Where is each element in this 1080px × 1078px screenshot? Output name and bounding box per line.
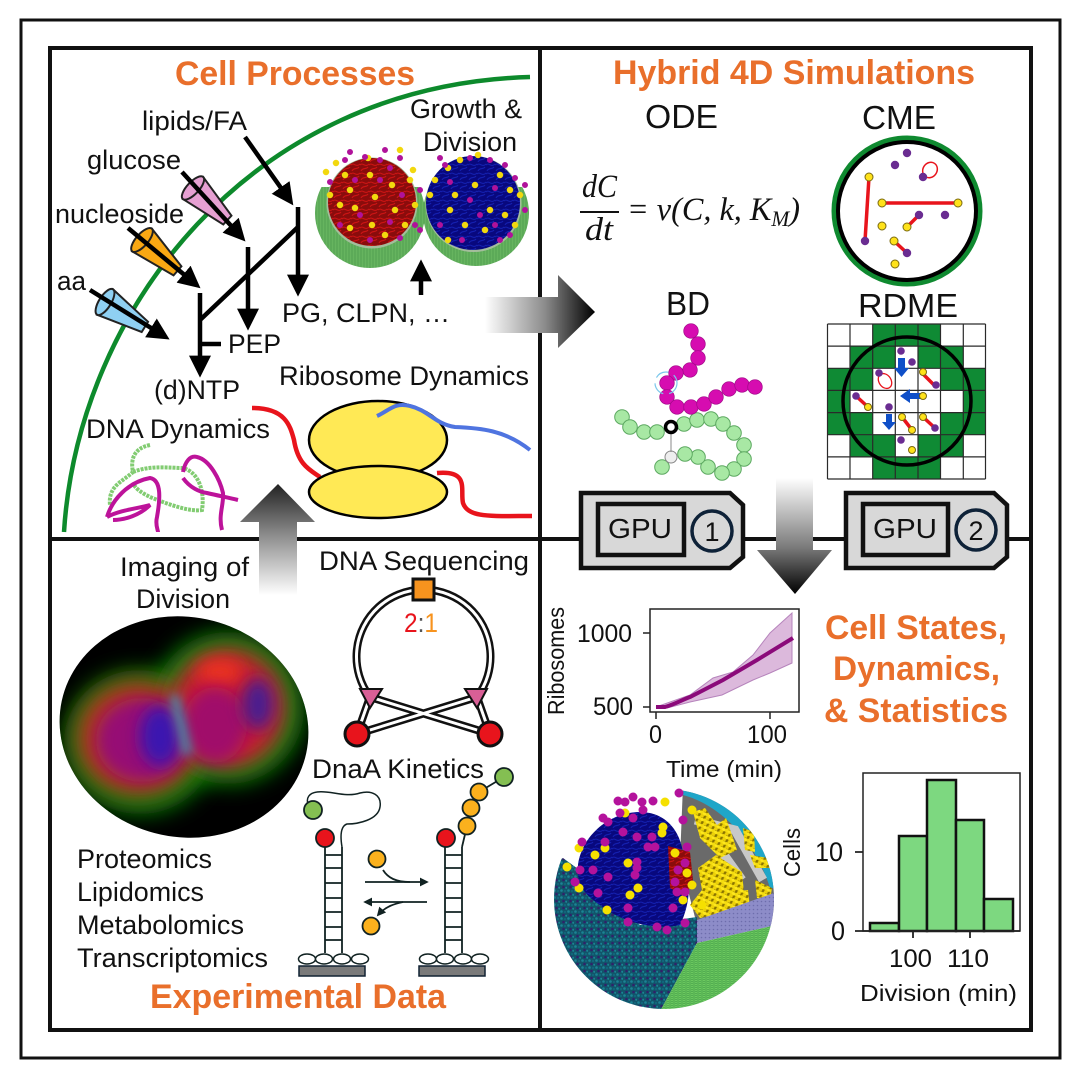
- line chart: ribosomes vs time: Time (min): [666, 756, 782, 782]
- labels: metabolites: [55, 106, 450, 405]
- histogram: division time: 100: [889, 945, 932, 973]
- heading: cell states, dynamics, statistics: Cell States,: [825, 609, 1007, 647]
- ODE equation: M: [770, 206, 791, 231]
- line chart: ribosomes vs time: Ribosomes: [543, 607, 569, 715]
- replication diagram: [345, 579, 502, 746]
- label: imaging of division: Imaging of: [120, 552, 250, 582]
- GPU 1 number: [692, 511, 732, 551]
- line chart: ribosomes vs time: 1000: [577, 620, 632, 648]
- GPU 2 chip box: [863, 504, 948, 555]
- DnaA right structure: [419, 768, 513, 976]
- label: ribosome dynamics: Ribosome Dynamics: [279, 361, 529, 391]
- ODE equation: dC: [582, 169, 618, 205]
- transporter: glucose: [178, 173, 238, 231]
- list: omics: Proteomics: [77, 844, 212, 874]
- histogram: division time: 0: [831, 916, 845, 946]
- transporter: amino acids: [92, 286, 153, 340]
- ODE equation: dt: [585, 212, 614, 248]
- labels: metabolites: (d)NTP: [154, 375, 240, 405]
- histogram: division time: Division (min): [860, 980, 1017, 1006]
- fluorescence microscopy image: [60, 616, 308, 838]
- transporter: nucleoside: [128, 225, 187, 282]
- heading: cell processes: Cell Processes: [175, 55, 415, 93]
- heading: cell states, dynamics, statistics: & Statistics: [824, 692, 1008, 730]
- label: growth and division: [410, 94, 522, 157]
- panel: hybrid 4D simulations: [580, 54, 986, 480]
- GPU 1 chip box: [598, 504, 684, 555]
- whole cell rendering: [554, 788, 774, 1009]
- cell membrane arc: [64, 77, 530, 532]
- list: omics: Transcriptomics: [77, 943, 268, 973]
- arrow: simulations to cell states: [757, 478, 832, 594]
- GPU 2 number: [956, 510, 996, 550]
- metabolic pathway arrows: [90, 137, 421, 371]
- label: DNA sequencing: DNA Sequencing: [319, 546, 529, 576]
- histogram: division time: Cells: [779, 828, 805, 877]
- list: omics: [77, 844, 268, 973]
- BD bead chains: [615, 324, 762, 480]
- label: CME: CME: [862, 99, 936, 136]
- GPU 2 number: 2: [968, 516, 984, 546]
- histogram: division time: 10: [815, 837, 843, 867]
- heading: cell states, dynamics, statistics: Dynamics,: [833, 650, 1000, 688]
- panel: cell states: [540, 607, 1020, 1015]
- panel: cell processes: [55, 55, 532, 532]
- labels: metabolites: nucleoside: [55, 199, 184, 229]
- labels: metabolites: glucose: [87, 145, 181, 175]
- label: imaging of division: [120, 552, 250, 614]
- label: DNA dynamics: DNA Dynamics: [86, 414, 270, 444]
- RDME lattice: [828, 324, 986, 479]
- dividing cell rendering: [315, 150, 529, 268]
- arrow: cell processes to simulations: [485, 275, 595, 348]
- GPU node 2: [846, 493, 1007, 568]
- GPU node 1: [581, 493, 743, 568]
- list: omics: Lipidomics: [77, 877, 204, 907]
- label: BD: BD: [666, 285, 710, 322]
- ribosome: [252, 401, 532, 518]
- heading: experimental data: Experimental Data: [150, 978, 447, 1016]
- list: omics: Metabolomics: [77, 910, 244, 940]
- heading: cell states, dynamics, statistics: [824, 609, 1008, 730]
- histogram: division time: [779, 773, 1020, 1006]
- line chart: ribosomes vs time: 500: [593, 693, 633, 721]
- CME diagram: [834, 138, 980, 284]
- labels: metabolites: PEP: [228, 329, 281, 359]
- GPU 1 label: GPU: [608, 513, 672, 544]
- label: imaging of division: Division: [136, 584, 230, 614]
- labels: metabolites: aa: [57, 266, 87, 296]
- ODE equation: = ν(C, k, K: [627, 192, 775, 228]
- labels: metabolites: PG, CLPN, …: [282, 298, 450, 328]
- label: ODE: ODE: [645, 98, 718, 135]
- heading: hybrid simulations: Hybrid 4D Simulations: [613, 54, 975, 92]
- line chart: ribosomes vs time: 100: [747, 721, 787, 749]
- line chart: ribosomes vs time: 0: [649, 721, 662, 749]
- ODE equation: [580, 169, 800, 248]
- ODE equation: ): [787, 192, 800, 228]
- label: RDME: RDME: [858, 287, 958, 324]
- label: growth and division: Growth &: [410, 94, 522, 124]
- label: DnaA kinetics: DnaA Kinetics: [312, 754, 484, 784]
- histogram: division time: 110: [947, 945, 989, 973]
- DNA strands: [107, 445, 238, 532]
- equilibrium arrows: [362, 850, 427, 934]
- ratio 2:1: 2:1: [404, 608, 438, 638]
- label: growth and division: Division: [423, 127, 517, 157]
- arrow: data to cell processes: [240, 484, 315, 595]
- GPU 1 number: 1: [704, 517, 720, 547]
- line chart: ribosomes vs time: [543, 607, 799, 782]
- GPU 2 label: GPU: [873, 513, 937, 544]
- labels: metabolites: lipids/FA: [142, 106, 247, 136]
- panel: experimental data: [50, 546, 529, 1016]
- DnaA left structure: [298, 792, 380, 976]
